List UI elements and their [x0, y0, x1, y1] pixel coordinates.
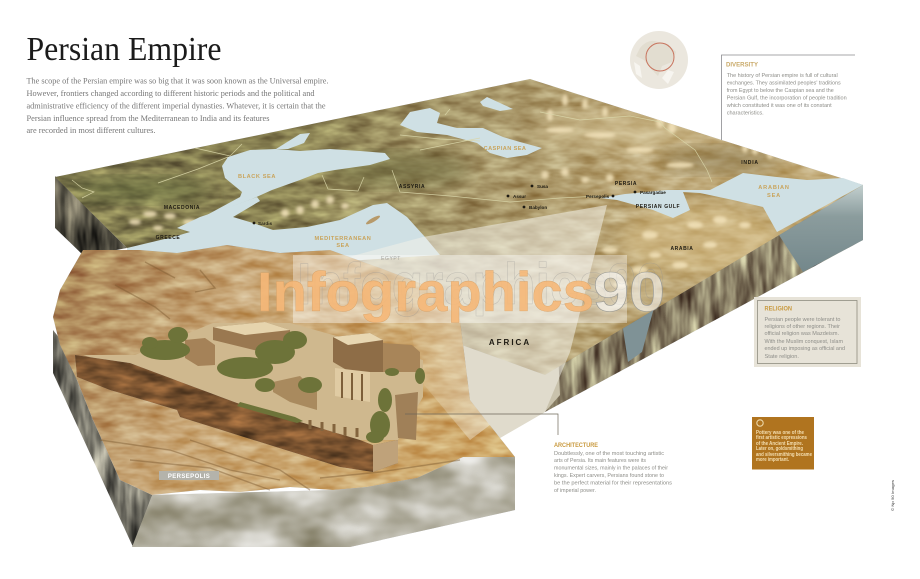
panel: pottery note [752, 417, 814, 470]
panel: religion: official religion was Mazdeism. [764, 331, 839, 337]
label: Persepolis [159, 471, 219, 480]
watermark: Infographics [257, 260, 594, 323]
Aral Sea [480, 97, 513, 111]
Black Sea [205, 149, 390, 216]
panel: diversity: from Egypt to below the Caspian sea and the [727, 88, 834, 94]
Cyprus [365, 214, 381, 226]
map labels: ARABIA [670, 246, 694, 252]
panel: religion: Persian people were tolerant to [764, 317, 840, 323]
sand surface [53, 245, 515, 495]
panel: diversity: Persian Gulf, the incorporation of people tradition [727, 95, 847, 101]
map labels: AFRICA [489, 338, 531, 347]
Mediterranean Sea [127, 197, 440, 262]
panel: diversity: characteristics. [727, 111, 764, 117]
panel: pottery note: of the Ancient Empire. [756, 441, 804, 447]
panel: architecture: ARCHITECTURE [554, 443, 598, 449]
map labels: ARABIAN [758, 185, 790, 191]
map labels: GREECE [156, 235, 180, 241]
water bodies [127, 97, 863, 262]
palace wall [75, 355, 398, 472]
watermark: Infographics90 [297, 252, 665, 317]
wall corner [373, 440, 398, 472]
panel: architecture [554, 443, 672, 494]
panel: pottery note: and silversmithing became [756, 452, 812, 458]
map labels: SEA [767, 193, 781, 199]
panel: pottery note: Later on, goldsmithing [756, 446, 803, 452]
panel: pottery note: Pottery was one of the [756, 430, 804, 436]
map labels: MEDITERRANEAN [315, 236, 371, 242]
map labels: PERSIA [615, 181, 637, 187]
panel: architecture: be the perfect material for their representations [554, 480, 672, 486]
callout lines: diversity [722, 55, 855, 140]
panel: religion: religions of other regions. Their [764, 324, 840, 330]
intro text [26, 76, 328, 135]
panel: architecture: of imperial power. [554, 488, 596, 494]
map labels: ASSYRIA [399, 184, 425, 190]
label: Persepolis: PERSEPOLIS [168, 474, 210, 480]
intro text: The scope of the Persian empire was so big that it was soon known as the Universal empire. [26, 76, 328, 86]
beam from map to Persepolis [330, 205, 607, 438]
palace terrace [83, 323, 423, 440]
city markers: Assur [513, 194, 526, 199]
panel: slab side faces [55, 176, 863, 438]
Persian Gulf and Arabian Sea [600, 173, 863, 232]
city markers: Sardis [258, 221, 272, 226]
Caspian Sea [400, 108, 542, 158]
map labels: BLACK SEA [238, 174, 276, 180]
panel: diversity: DIVERSITY [726, 62, 758, 68]
panel: architecture: monumental sizes, mainly in the palaces of their [554, 466, 668, 472]
panel: diversity: exchanges. They assimilated peoples' traditions [727, 81, 841, 87]
map labels: SEA [336, 243, 350, 249]
panel: diversity: The history of Persian empire is full of cultural [727, 73, 838, 79]
rock left side [53, 330, 152, 547]
palace buildings [185, 322, 420, 440]
city markers [253, 184, 666, 226]
city markers: Susa [537, 184, 548, 189]
city markers: Babylon [529, 205, 547, 210]
map labels: INDIA [741, 160, 759, 166]
callout line: architecture [405, 414, 558, 435]
land [55, 79, 863, 375]
rivers and borders [72, 109, 712, 202]
panel: Persepolis block [53, 245, 515, 547]
city markers: Pasargadae [640, 190, 666, 195]
panel: pottery note: first artistic expressions [756, 435, 807, 441]
panel: religion [754, 297, 861, 367]
panel: religion: ended up imposing as official and [764, 346, 845, 352]
intro text: administrative efficiency of the different imperial dynasties. Whatever, it is certain that the [26, 101, 326, 110]
intro text: Persian influence spread from the Mediterranean to India and its features [26, 114, 270, 123]
panel: religion: State religion. [764, 354, 799, 360]
panel: religion: With the Muslim conquest, Islam [764, 339, 843, 345]
panel: pottery note: more important. [756, 457, 790, 463]
intro text: However, frontiers changed according to different historic periods and the political and [26, 89, 314, 98]
map labels: CASPIAN SEA [484, 146, 526, 152]
map surface [55, 79, 863, 375]
terrain highlights [70, 94, 780, 288]
panel: architecture: kings. Expert carvers, Persians found stone to [554, 473, 664, 479]
title: Persian Empire [26, 31, 222, 68]
panel: religion: RELIGION [764, 306, 792, 312]
intro text: are recorded in most different cultures. [26, 126, 156, 135]
beam over sand [400, 270, 490, 440]
map labels: EGYPT [381, 256, 401, 262]
icon: pottery [757, 420, 763, 426]
icon: locator globe [630, 31, 688, 89]
panel: architecture: Doubtlessly, one of the most touching artistic [554, 451, 664, 457]
panel: architecture: arts of Persia. Its main features were its [554, 458, 646, 464]
map labels: PERSIAN GULF [636, 204, 680, 210]
rock front side [132, 457, 515, 547]
panel: diversity: which constituted it was one of its constant [726, 103, 832, 109]
rock strata [100, 262, 460, 490]
map labels [156, 146, 790, 347]
map labels: MACEDONIA [164, 205, 200, 211]
panel: diversity [726, 62, 847, 117]
palace trees [140, 327, 425, 443]
watermark: 90 [593, 260, 665, 323]
credit: © Np 90 Images [891, 480, 895, 511]
city markers: Persepolis [586, 194, 610, 199]
